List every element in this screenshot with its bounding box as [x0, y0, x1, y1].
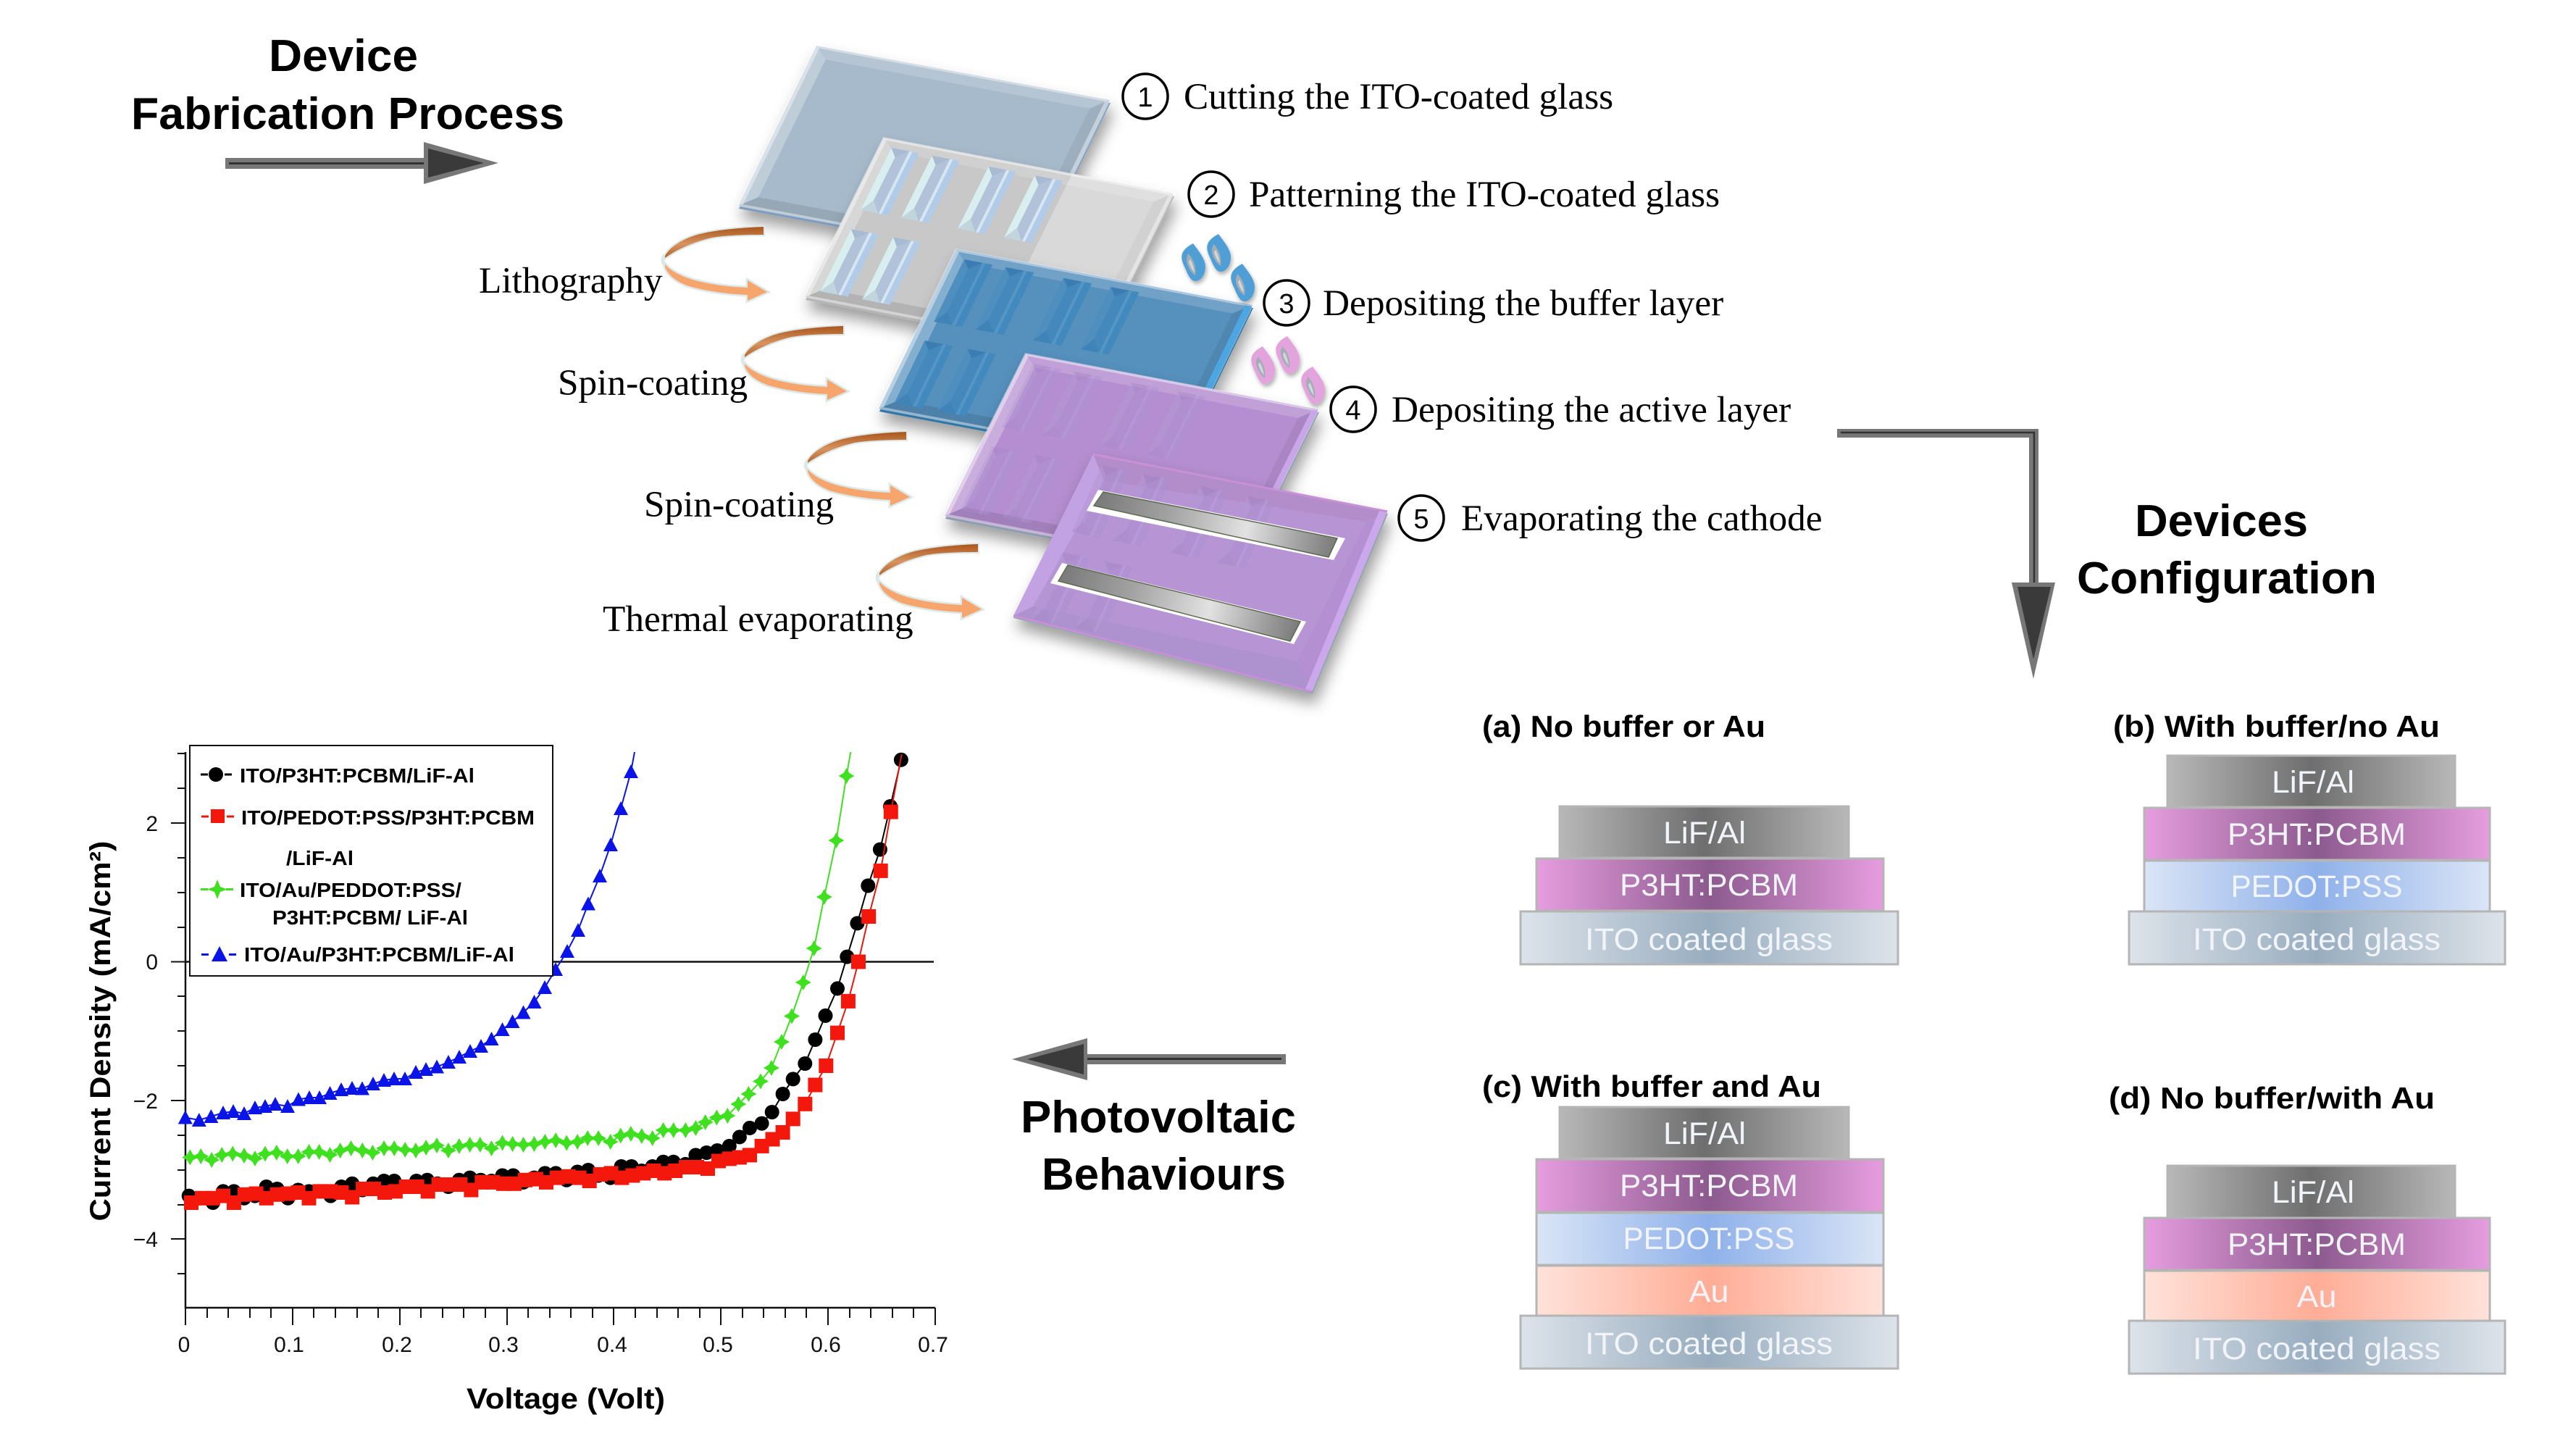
- labels for stack c: P3HT:PCBM: [1620, 1169, 1798, 1203]
- heading: photovoltaic behaviours: Photovoltaic: [1021, 1093, 1296, 1143]
- heading: device fabrication process: [131, 31, 564, 139]
- legend entry red: /LiF-Al: [286, 847, 354, 869]
- series: ITO/P3HT:PCBM/LiF-Al black: [189, 760, 901, 1203]
- panel: stacked device fabrication plates: [738, 46, 1388, 694]
- cathode bar upper: [1087, 490, 1345, 560]
- labels for stack a: ITO coated glass: [1585, 922, 1833, 957]
- labels for stack d: LiF/Al: [2272, 1175, 2354, 1210]
- step 4 label: Depositing the active layer: [1392, 389, 1791, 430]
- heading: photovoltaic behaviours: Behaviours: [1042, 1150, 1286, 1200]
- series: ITO/PEDOT:PSS/P3HT:PCBM/LiF-Al red: [191, 754, 902, 1203]
- arrow: devices to photovoltaic behaviours: [1012, 1038, 1286, 1080]
- labels for stack b: ITO coated glass: [2193, 922, 2441, 957]
- step 2 label: Patterning the ITO-coated glass: [1249, 174, 1720, 215]
- chart legend: [190, 746, 553, 976]
- layer stack c: [1521, 1107, 1898, 1369]
- x tick labels: 0.4: [597, 1333, 627, 1357]
- plate 5 body: [1013, 454, 1388, 694]
- y tick labels: −2: [133, 1090, 158, 1114]
- labels for stack a: [1585, 816, 1833, 957]
- legend entry green: ITO/Au/PEDDOT:PSS/: [240, 879, 461, 901]
- labels for stack b: P3HT:PCBM: [2228, 817, 2406, 852]
- step 1 label: 1: [1137, 83, 1153, 113]
- legend entry red: ITO/PEDOT:PSS/P3HT:PCBM: [241, 806, 535, 829]
- labels for stack d: P3HT:PCBM: [2228, 1227, 2406, 1262]
- heading: devices configuration: Devices: [2135, 496, 2308, 546]
- labels for stack c: LiF/Al: [1663, 1116, 1746, 1151]
- x tick labels: 0.5: [703, 1333, 733, 1357]
- chart axes and ticks: [171, 752, 935, 1325]
- labels for stack b: LiF/Al: [2272, 765, 2354, 800]
- title d: (d) No buffer/with Au: [2109, 1081, 2435, 1115]
- series: ITO/Au/PEDOT:PSS/P3HT:PCBM/LiF-Al green: [190, 752, 850, 1160]
- plate 2: patterned ITO glass: [805, 138, 1174, 356]
- y tick labels: [133, 812, 158, 1252]
- plate 1: ITO-coated glass: [738, 46, 1111, 263]
- x tick labels: 0.3: [488, 1333, 519, 1357]
- labels for stack d: Au: [2296, 1279, 2337, 1314]
- legend entry red: [201, 806, 535, 869]
- x tick labels: [178, 1333, 948, 1357]
- step 4 label: 4: [1345, 396, 1361, 426]
- labels for stack c: PEDOT:PSS: [1623, 1222, 1795, 1256]
- step 3 label: 3: [1279, 289, 1295, 320]
- title a: (a) No buffer or Au: [1482, 709, 1765, 743]
- heading: devices configuration: [2077, 496, 2377, 604]
- heading: device fabrication process: Fabrication Process: [131, 89, 564, 139]
- step 3 label: Depositing the buffer layer: [1323, 283, 1723, 324]
- layer stack a: [1521, 806, 1898, 964]
- labels for stack d: [2193, 1175, 2441, 1366]
- y tick labels: 0: [146, 951, 158, 974]
- x tick labels: 0.6: [811, 1333, 841, 1357]
- labels for stack b: [2193, 765, 2441, 957]
- title c: (c) With buffer and Au: [1482, 1069, 1821, 1103]
- arrow: second spin-coating curve: [806, 432, 910, 506]
- legend entry black: ITO/P3HT:PCBM/LiF-Al: [240, 764, 474, 787]
- process label: lithography: Lithography: [479, 260, 663, 301]
- x tick labels: 0.1: [274, 1333, 304, 1357]
- arrow: thermal evaporating curve: [877, 544, 982, 618]
- panel: configuration b: [2113, 709, 2505, 964]
- labels for stack c: ITO coated glass: [1585, 1327, 1833, 1361]
- arrow: fabrication process to the right: [225, 142, 498, 184]
- plate 5: cathode layer: [1013, 454, 1388, 694]
- step 5 label: 5: [1413, 504, 1429, 535]
- panel: configuration d: [2109, 1081, 2505, 1374]
- panel: configuration a: [1482, 709, 1898, 964]
- y axis title: Current Density (mA/cm²): [85, 840, 117, 1222]
- labels for stack a: LiF/Al: [1663, 816, 1746, 851]
- layer stack b: [2129, 756, 2505, 964]
- layer stack d: [2129, 1166, 2505, 1374]
- plate 4: active layer: [945, 354, 1319, 575]
- heading: devices configuration: Configuration: [2077, 554, 2377, 604]
- arrow: spin-coating curve: [743, 326, 847, 400]
- process label: thermal evaporating: Thermal evaporating: [603, 598, 913, 640]
- labels for stack c: Au: [1689, 1274, 1728, 1309]
- labels for stack d: ITO coated glass: [2193, 1332, 2441, 1366]
- x tick labels: 0: [178, 1333, 190, 1357]
- legend entry blue: ITO/Au/P3HT:PCBM/LiF-Al: [244, 943, 514, 966]
- labels for stack c: [1585, 1116, 1833, 1361]
- icon: blue droplets: [1182, 234, 1255, 301]
- process label: spin-coating buffer: Spin-coating: [558, 362, 748, 404]
- arrow: lithography curve: [663, 227, 767, 301]
- step 5 label: Evaporating the cathode: [1461, 498, 1823, 539]
- legend entry green: [201, 879, 468, 929]
- labels for stack b: PEDOT:PSS: [2231, 869, 2402, 904]
- title b: (b) With buffer/no Au: [2113, 709, 2440, 743]
- icon: pink droplets: [1251, 336, 1325, 404]
- heading: device fabrication process: Device: [269, 31, 418, 81]
- process label: spin-coating active: Spin-coating: [644, 484, 834, 525]
- y tick labels: 2: [146, 812, 158, 836]
- legend entry green: P3HT:PCBM/ LiF-Al: [272, 906, 468, 929]
- x axis title: Voltage (Volt): [467, 1383, 665, 1415]
- x tick labels: 0.7: [918, 1333, 948, 1357]
- step 1 label: Cutting the ITO-coated glass: [1184, 76, 1613, 117]
- series: ITO/Au/P3HT:PCBM/LiF-Al blue: [185, 752, 635, 1120]
- x tick labels: 0.2: [382, 1333, 412, 1357]
- panel: configuration c: [1482, 1069, 1898, 1369]
- step 2 label: 2: [1203, 180, 1219, 211]
- plate 3: buffer layer: [879, 249, 1253, 467]
- cathode bar lower: [1050, 563, 1306, 644]
- arrow: elbow to devices configuration: [1837, 429, 2055, 679]
- heading: photovoltaic behaviours: [1021, 1093, 1296, 1200]
- y tick labels: −4: [133, 1228, 158, 1252]
- labels for stack a: P3HT:PCBM: [1620, 868, 1798, 903]
- chart: current density versus voltage: [85, 746, 948, 1415]
